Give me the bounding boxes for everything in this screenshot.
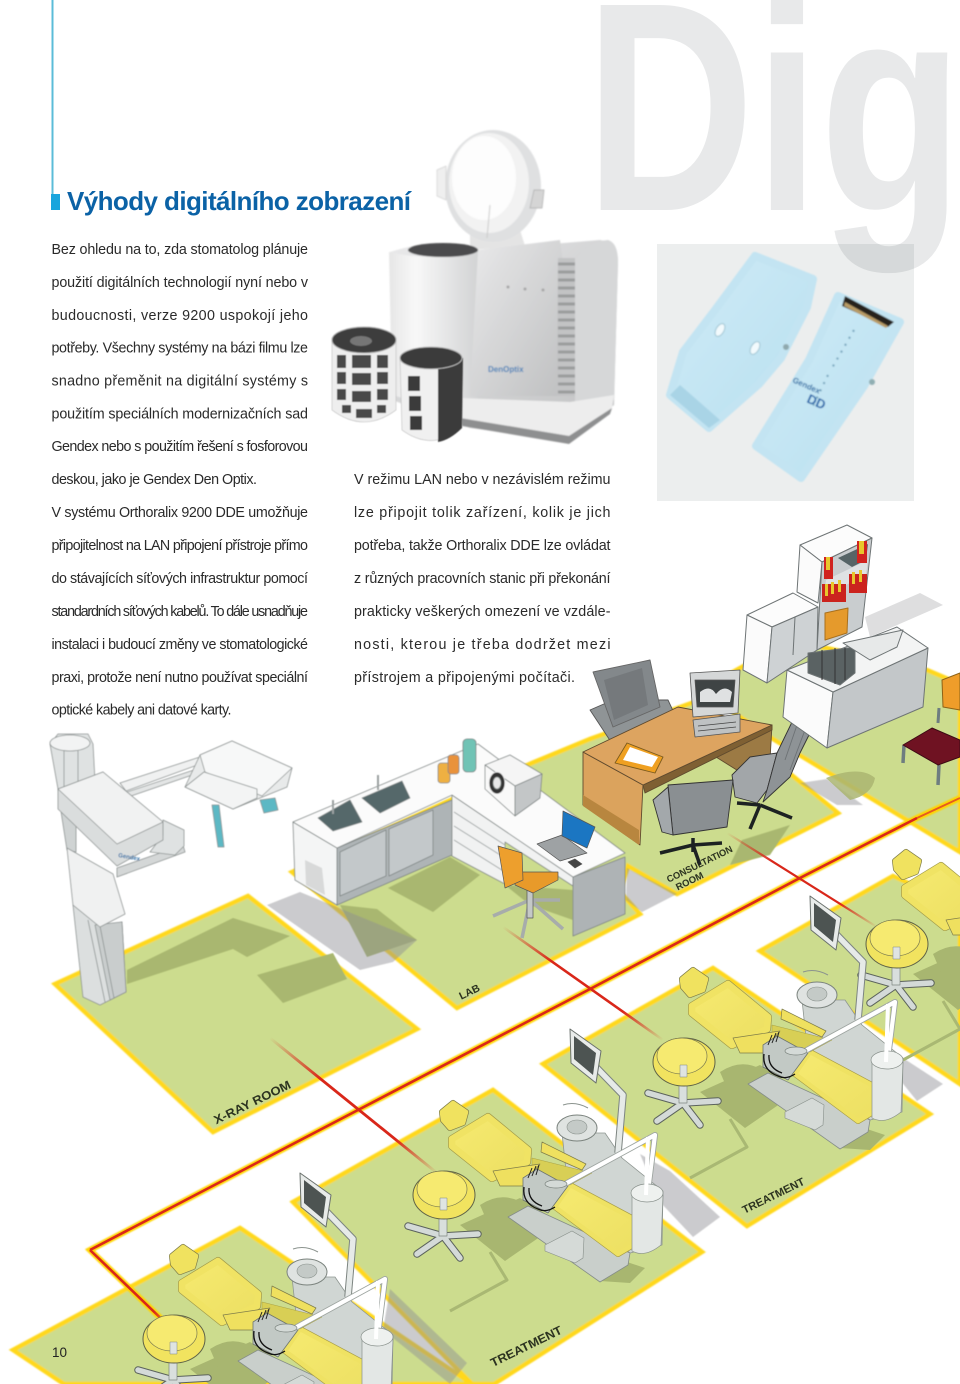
text column: left: Gendex nebo s použitím řešení s fosforovou [52, 439, 308, 455]
text column: right: V režimu LAN nebo v nezávislém režimu [354, 472, 610, 488]
room labels: ROOM [674, 870, 706, 893]
text column: left: snadno přeměnit na digitální systémy s [52, 374, 308, 390]
vents [575, 240, 618, 402]
text column: right: z různých pracovních stanic při překonání [354, 571, 611, 587]
dental chair: middle room [648, 896, 903, 1178]
room: lab and consultation [292, 700, 838, 1008]
base ledge [460, 395, 614, 436]
text column: left: budoucnosti, verze 9200 uspokojí jeho [52, 308, 308, 324]
text column: left: připojitelnost na LAN připojení přístroje přímo [52, 538, 308, 554]
reception desk [783, 670, 833, 748]
dental chair: right room [861, 778, 960, 1060]
text column: right [354, 472, 611, 686]
room: upper right [700, 640, 960, 852]
gray shadows across corridors [267, 779, 943, 1384]
consultation desk [583, 660, 772, 845]
lid [470, 228, 525, 250]
lab counter [293, 739, 625, 936]
photo: film processor [389, 130, 618, 444]
text column: left: V systému Orthoralix 9200 DDE umožňuje [52, 505, 308, 521]
text column: right: potřeba, takže Orthoralix DDE lze ovládat [354, 538, 611, 554]
sofa chair [942, 673, 960, 710]
microwave [485, 755, 542, 786]
photo: blue sensor plates [670, 256, 900, 478]
room labels [211, 844, 807, 1370]
room labels: TREATMENT [740, 1176, 807, 1217]
room: x-ray [55, 896, 417, 1132]
room labels: LAB [457, 982, 482, 1002]
text column: right: přístrojem a připojenými počítači. [354, 670, 575, 686]
x-ray machine: lower column [73, 905, 126, 1005]
room labels: TREATMENT [488, 1323, 565, 1370]
body [390, 240, 618, 440]
network cables: red lines [90, 798, 960, 1332]
room: treatment lower [293, 1090, 702, 1384]
text column: left [52, 242, 309, 718]
photo: blue sensor plates: Gendex [791, 376, 822, 396]
room: treatment right [760, 876, 960, 1084]
text column: left: použití digitálních technologií nyní nebo v [52, 275, 309, 291]
accent line [52, 0, 54, 194]
chair behind desk [590, 700, 675, 745]
text column: left: do stávajících síťových infrastruktur pomocí [52, 571, 308, 587]
text column: right: nosti, kterou je třeba dodržet mezi [354, 637, 610, 653]
text column: left: optické kabely ani datové karty. [52, 702, 232, 718]
text column: left: standardních síťových kabelů. To dále usnadňuje [52, 604, 308, 620]
consultation chairs [653, 720, 813, 865]
dental chair units [138, 778, 960, 1384]
text column: left: instalaci i budoucí změny ve stomatologické [52, 637, 308, 653]
text column: left: deskou, jako je Gendex Den Optix. [52, 472, 257, 488]
computer on desk [690, 670, 740, 737]
floor plan: room surfaces [13, 640, 960, 1384]
text column: left: Bez ohledu na to, zda stomatolog plánuje [52, 242, 308, 258]
red table [903, 745, 939, 785]
room labels: CONSULTATION [665, 844, 735, 885]
text column: left: praxi, protože není nutno používat speciální [52, 670, 308, 686]
floor shadows [127, 825, 790, 1003]
room: treatment middle [543, 968, 930, 1226]
photo: film processor: DenOptix [488, 365, 524, 374]
dental chair: far left room [138, 1173, 393, 1384]
text column: left: potřeby. Všechny systémy na bázi filmu lze [52, 340, 308, 356]
text column: right: prakticky veškerých omezení ve vzdále- [354, 604, 611, 620]
x-ray machine: Gendex [118, 853, 141, 863]
shadow behind cabinet [865, 593, 943, 637]
heading: Výhody digitálního zobrazení [67, 186, 412, 216]
text column: left: použitím speciálních modernizačních sad [52, 406, 308, 422]
dental chair: lower room [408, 1029, 663, 1311]
x-ray machine [50, 734, 292, 1005]
shadow blob by corridor [826, 772, 875, 800]
laptop and lab chair [493, 811, 595, 938]
room: treatment far left [13, 1228, 472, 1384]
room labels: X-RAY ROOM [211, 1078, 293, 1127]
page number: 10 [52, 1345, 67, 1360]
right cabinets and shelf [743, 525, 960, 785]
photo: blue sensor plates: DD [805, 391, 828, 412]
photo: film drums [332, 327, 463, 442]
photo panel: gray backing [657, 244, 914, 501]
text column: right: lze připojit tolik zařízení, kolik je jich [354, 505, 611, 521]
